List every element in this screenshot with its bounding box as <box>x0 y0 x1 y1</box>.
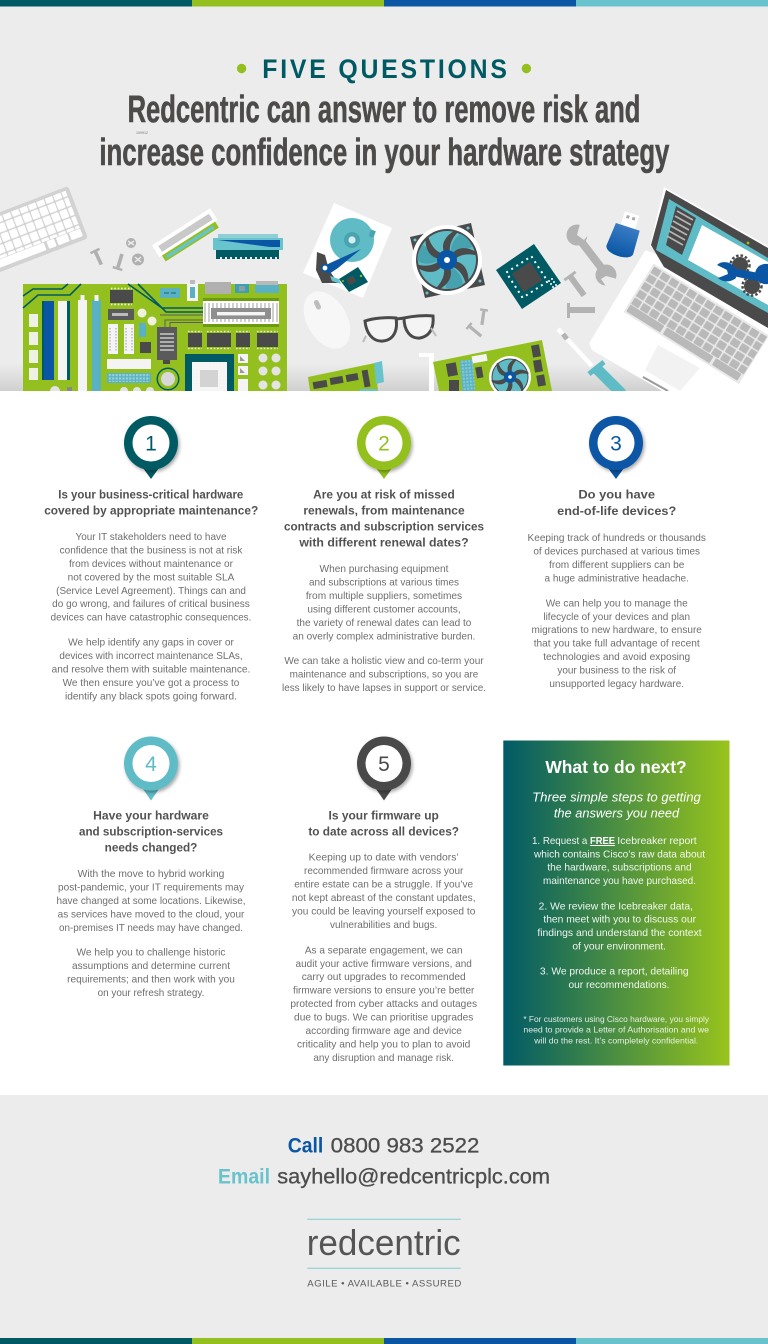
text 3: unsupported legacy hardware. <box>549 679 684 690</box>
bottom colour bar <box>0 1338 768 1344</box>
step 2: 2. We review the Icebreaker data, <box>539 901 693 912</box>
text 2: maintenance and subscriptions, so you are <box>290 670 479 680</box>
text 1: devices with incorrect maintenance SLAs, <box>59 651 243 662</box>
heading 5: Is your firmware up <box>329 808 439 822</box>
step 1: FREE <box>590 836 615 847</box>
text 5: vulnerabilities and bugs. <box>330 920 437 931</box>
text 2 <box>282 564 486 694</box>
text 2: the variety of renewal dates can lead to <box>297 618 472 629</box>
title <box>99 89 669 174</box>
heading 3 <box>557 488 676 518</box>
heading 4 <box>79 808 223 855</box>
text 1 <box>51 532 251 702</box>
text 5: any disruption and manage risk. <box>313 1053 454 1064</box>
footnote <box>523 1015 710 1046</box>
icon: pin 4: 4 <box>145 753 157 776</box>
email line: sayhello@redcentricplc.com <box>277 1165 550 1188</box>
hardware illustration <box>0 186 768 398</box>
text 1: devices can have catastrophic consequences. <box>51 613 251 624</box>
step 2 <box>537 901 702 953</box>
text 4: post-pandemic, your IT requirements may <box>58 882 245 894</box>
text 4: With the move to hybrid working <box>78 869 225 880</box>
icon: memory stick blue <box>213 234 283 259</box>
text 3: of devices purchased at various times <box>533 546 700 558</box>
text 2: using different customer accounts, <box>307 604 461 615</box>
text 1: from devices without maintenance or <box>69 559 234 570</box>
text 5: due to bugs. We can prioritise upgrades <box>294 1013 473 1024</box>
icon: pin 3 <box>589 416 643 479</box>
heading 2 <box>284 488 484 550</box>
text 1: We help identify any gaps in cover or <box>68 638 234 648</box>
logo: redcentric: redcentric <box>307 1222 461 1263</box>
question 1 <box>44 416 258 702</box>
text 3: migrations to new hardware, to ensure <box>532 625 702 636</box>
icon: pin 1 <box>124 416 178 479</box>
step 1 <box>532 836 705 887</box>
text 3: your business to the risk of <box>557 666 676 677</box>
text 4: assumptions and determine current <box>72 961 230 972</box>
text 3 <box>528 533 706 690</box>
icon: cooling fan <box>410 223 485 298</box>
text 1: and resolve them with suitable maintenance. <box>52 664 250 675</box>
icon: mouse <box>304 292 350 348</box>
step 2: of your environment. <box>572 942 666 953</box>
icon: pin 1: 1 <box>145 432 157 456</box>
icon: wrench <box>566 224 616 286</box>
heading 3: end-of-life devices? <box>557 504 676 518</box>
heading 1: covered by appropriate maintenance? <box>44 504 258 518</box>
text 5: criticality and help you to plan to avoid <box>297 1040 471 1050</box>
step 3: our recommendations. <box>568 980 670 991</box>
call line: Call <box>288 1134 323 1157</box>
call line: 0800 983 2522 <box>331 1134 479 1157</box>
text 1: confidence that the business is not at risk <box>60 545 243 556</box>
text 5: carry out upgrades to recommended <box>302 972 466 983</box>
text 3: technologies and avoid exposing <box>543 652 690 663</box>
logo: redcentric: AGILE • AVAILABLE • ASSURED <box>307 1279 461 1290</box>
text 5: you could be leaving yourself exposed to <box>292 906 476 918</box>
email line: Email <box>218 1165 270 1188</box>
text 3: a huge administrative headache. <box>545 573 689 584</box>
eyebrow: five questions: FIVE QUESTIONS <box>262 55 507 84</box>
footnote: * For customers using Cisco hardware, you simply <box>523 1015 710 1024</box>
heading 1 <box>44 488 258 518</box>
icon: graphics card <box>419 340 552 391</box>
text 2: an overly complex administrative burden. <box>293 631 475 642</box>
step 3: 3. We produce a report, detailing <box>540 967 689 978</box>
step 1: Icebreaker report <box>617 836 697 847</box>
logo: redcentric <box>307 1219 461 1290</box>
text 2: and subscriptions at various times <box>309 578 459 588</box>
panel subheading <box>532 791 701 821</box>
icon: small circuit card <box>308 361 384 392</box>
text 3: that you take full advantage of recent <box>534 639 700 650</box>
panel subheading: Three simple steps to getting <box>532 791 701 805</box>
text 2: less likely to have lapses in support or service. <box>282 683 486 694</box>
text 3: We can help you to manage the <box>546 598 688 609</box>
text 1: Your IT stakeholders need to have <box>76 532 227 543</box>
text 5 <box>290 853 477 1064</box>
icon: pin 5: 5 <box>378 753 390 776</box>
step 1: maintenance you have purchased. <box>543 876 696 887</box>
text 3: lifecycle of your devices and plan <box>543 612 690 623</box>
text 2: We can take a holistic view and co-term your <box>284 656 484 667</box>
text 2: When purchasing equipment <box>320 564 449 575</box>
text 4: as services have moved to the cloud, your <box>58 909 245 920</box>
question 5 <box>290 736 477 1064</box>
step 1: the hardware, subscriptions and <box>547 863 692 874</box>
icon: screws right <box>466 271 595 339</box>
heading 4: and subscription-services <box>79 824 223 838</box>
text 1: (Service Level Agreement). Things can and <box>56 586 246 597</box>
text 5: firmware versions to ensure you’re better <box>293 986 475 997</box>
text 4 <box>56 869 246 999</box>
icon: pin 5 <box>357 736 411 800</box>
heading 2: renewals, from maintenance <box>303 504 465 518</box>
icon: laptop <box>591 187 768 392</box>
step 2: then meet with you to discuss our <box>543 915 697 926</box>
text 5: entire estate can be a struggle. If you’ve <box>294 880 473 891</box>
text 5: As a separate engagement, we can <box>305 945 463 956</box>
icon: keyboard <box>0 186 88 274</box>
text 5: Keeping up to date with vendors’ <box>309 853 459 864</box>
step 1: which contains Cisco’s raw data about <box>533 849 705 860</box>
small reference code: 109912 <box>136 131 148 135</box>
step 2: findings and understand the context <box>537 928 702 939</box>
icon: screwdriver <box>558 329 622 394</box>
question 3 <box>528 416 706 690</box>
panel: what to do next <box>503 740 730 1066</box>
heading 2: contracts and subscription services <box>284 520 484 534</box>
icon: motherboard <box>23 280 287 396</box>
heading 2: with different renewal dates? <box>298 536 469 550</box>
text 1: identify any black spots going forward. <box>65 691 237 702</box>
text 1: not covered by the most suitable SLA <box>68 572 234 583</box>
text 4: We help you to challenge historic <box>76 948 226 959</box>
footnote: will do the rest. It’s completely confidential. <box>533 1037 698 1046</box>
text 2: from multiple suppliers, sometimes <box>306 591 462 602</box>
text 3: Keeping track of hundreds or thousands <box>528 533 706 544</box>
icon: pin 2 <box>357 416 411 479</box>
step 3 <box>540 967 689 991</box>
heading 4: Have your hardware <box>93 808 209 822</box>
text 3: from different suppliers can be <box>549 560 685 571</box>
text 1: do go wrong, and failures of critical business <box>52 599 250 610</box>
heading 5 <box>308 808 459 838</box>
text 5: not kept abreast of the constant updates, <box>292 893 476 904</box>
text 4: on-premises IT needs may have changed. <box>59 923 243 934</box>
panel subheading: the answers you need <box>554 807 680 821</box>
step 1: 1. Request a <box>532 836 588 847</box>
text 4: requirements; and then work with you <box>67 975 235 986</box>
text 1: We then ensure you’ve got a process to <box>63 678 240 689</box>
footer panel <box>0 1095 768 1338</box>
icon: USB stick <box>606 212 640 258</box>
heading 3: Do you have <box>578 488 655 502</box>
question 2 <box>282 416 486 694</box>
icon: processor chip <box>496 244 561 309</box>
icon: pin 2: 2 <box>378 432 390 456</box>
heading 1: Is your business-critical hardware <box>58 488 243 502</box>
icon: pin 4 <box>124 736 178 800</box>
top colour bar <box>0 0 768 6</box>
heading 2: Are you at risk of missed <box>313 488 455 502</box>
icon: hard drive <box>303 203 392 298</box>
text 5: protected from cyber attacks and outages <box>290 999 477 1010</box>
icon: screws left <box>90 238 144 271</box>
heading 4: needs changed? <box>105 841 197 855</box>
panel heading: What to do next? <box>545 757 687 777</box>
icon: pin 3: 3 <box>610 432 622 456</box>
question 4 <box>56 736 246 999</box>
text 4: have changed at some locations. Likewise, <box>56 896 246 907</box>
text 5: according firmware age and device <box>306 1026 462 1037</box>
heading 5: to date across all devices? <box>308 824 459 838</box>
icon: memory stick white <box>152 208 221 263</box>
footnote: need to provide a Letter of Authorisation and we <box>523 1026 710 1035</box>
icon: glasses <box>363 316 436 342</box>
header panel <box>0 6 768 391</box>
text 5: recommended firmware across your <box>304 866 464 877</box>
text 4: on your refresh strategy. <box>98 988 204 999</box>
text 5: audit your active firmware versions, and <box>296 959 472 970</box>
